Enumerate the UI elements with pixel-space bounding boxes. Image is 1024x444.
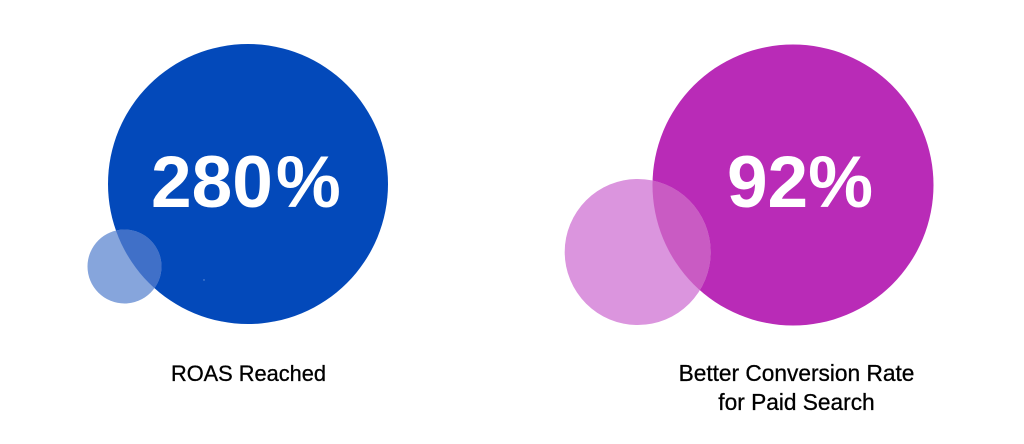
value: 92%: 92% bbox=[727, 142, 873, 223]
large magenta circle bbox=[652, 44, 934, 326]
infographic bbox=[88, 44, 934, 410]
value: 280%: 280% bbox=[151, 142, 341, 223]
panel: conversion metric bbox=[565, 44, 934, 415]
label: ROAS Reached: ROAS Reached bbox=[171, 361, 326, 386]
label: Better Conversion Rate for Paid Search: for Paid Search bbox=[718, 389, 875, 415]
label: Better Conversion Rate for Paid Search: Better Conversion Rate bbox=[679, 360, 914, 386]
small translucent blue circle bbox=[88, 230, 162, 304]
overlap of magenta circles bbox=[652, 180, 710, 290]
panel: ROAS metric bbox=[88, 44, 388, 386]
speck bbox=[203, 279, 205, 281]
overlap of blue circles bbox=[116, 230, 162, 288]
medium translucent magenta circle bbox=[565, 179, 711, 325]
large blue circle bbox=[108, 44, 388, 324]
